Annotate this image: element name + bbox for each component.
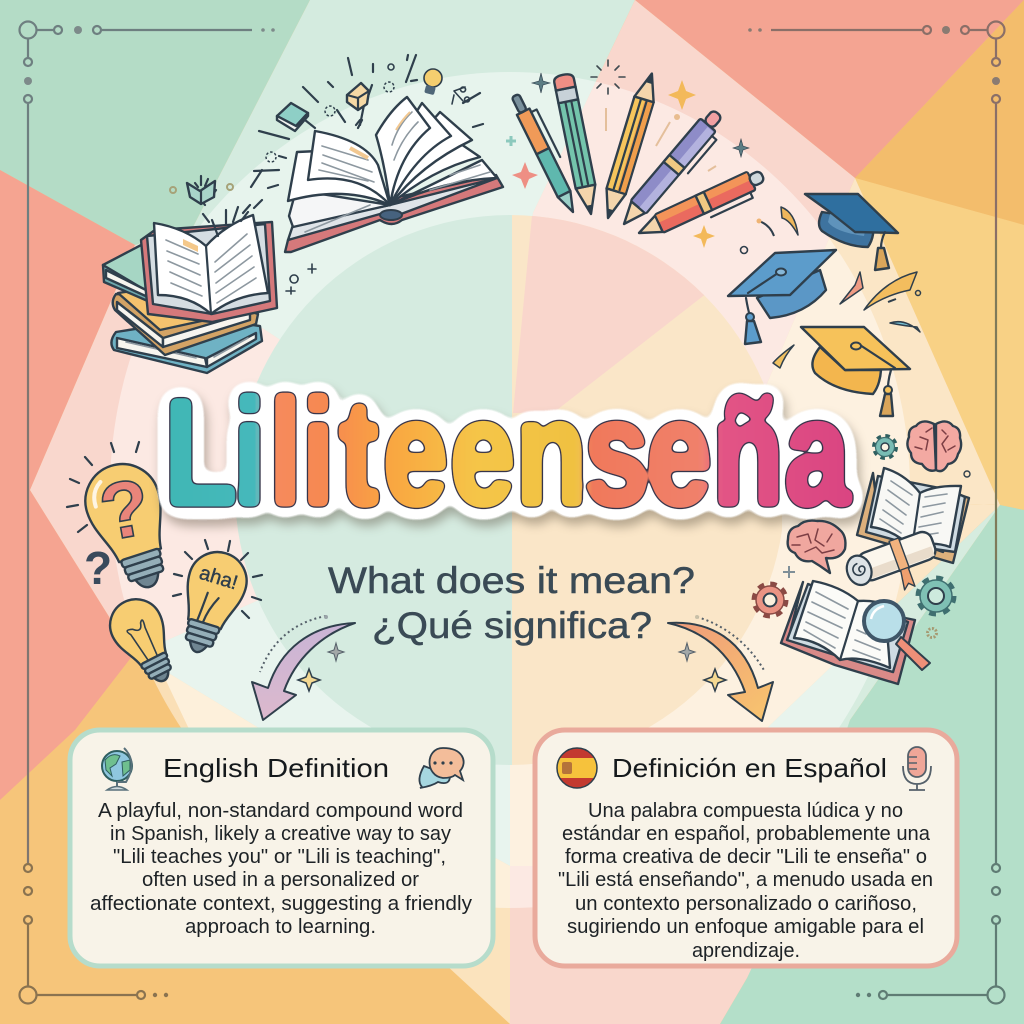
icon: aha lightbulb: aha! [197, 562, 240, 594]
icon: large open book with fanning pages [285, 97, 503, 252]
icon: dark question mark: ? [84, 542, 112, 594]
icon: gear teal small [875, 437, 895, 457]
arrow: right curved orange [668, 615, 773, 721]
subtitle: What does it mean? [328, 560, 695, 601]
icon: small green open book [187, 176, 215, 204]
icon: lightbulb with question mark: ? [93, 461, 157, 558]
icon: aha lightbulb [168, 540, 262, 660]
icon: small teal book [277, 103, 308, 131]
icon: blue cap [728, 250, 836, 344]
icon: stack of books with open book [103, 170, 277, 373]
text: Spanish definition body: un contexto personalizado o cariñoso, [575, 893, 917, 915]
icon: brain upper [907, 421, 961, 471]
icon: yellow pencil [598, 71, 661, 221]
icon: microphone [903, 747, 931, 790]
icon: share node [452, 87, 470, 104]
text: English definition body: "Lili teaches you" or "Lili is teaching", [113, 846, 446, 868]
icon: navy cap [805, 194, 898, 270]
panel: English definition [70, 730, 493, 966]
icon: diploma scroll [842, 527, 945, 606]
icon: gold cap [801, 327, 910, 416]
icon: globe [102, 748, 132, 790]
text: Spanish definition body [558, 800, 933, 962]
icon: green pencil [553, 73, 601, 216]
icon: coral pen [635, 167, 769, 248]
icon: sparkles around pens [506, 60, 749, 254]
text: Spanish definition body: aprendizaje. [692, 940, 800, 962]
icon: graduation caps [728, 194, 920, 416]
arrow: left curved purple [252, 615, 355, 720]
icon: gear teal large [919, 579, 953, 613]
icon: confetti [756, 207, 920, 368]
text: Spanish definition body: forma creativa de decir "Lili te enseña" o [565, 846, 927, 868]
right cluster icons [755, 421, 970, 684]
text: English definition body: in Spanish, likely a creative way to say [110, 823, 451, 845]
icon: small gold gear [928, 628, 936, 638]
icon: plain lightbulb [101, 590, 187, 692]
title: Liliteenseña [165, 368, 851, 536]
text: Spanish definition body: Una palabra compuesta lúdica y no [588, 800, 903, 822]
icon: purple pen [616, 107, 730, 234]
icon: speech bubbles [419, 748, 464, 788]
icon: cube [347, 83, 369, 110]
icon: lightbulb with question mark [67, 442, 185, 598]
icon: Spain flag [557, 748, 597, 788]
subtitle [328, 560, 695, 646]
text: English definition body: A playful, non-standard compound word [98, 800, 463, 822]
subtitle: ¿Qué significa? [372, 605, 652, 646]
icon: small bulb [424, 69, 442, 95]
text: English definition body: approach to learning. [185, 916, 376, 938]
text: English definition body: affectionate context, suggesting a friendly [90, 893, 472, 915]
icon: gear red [755, 585, 785, 615]
heading: Definición en Español: Definición en Español [612, 753, 887, 783]
heading: English Definition: English Definition [163, 753, 389, 783]
icon: pens and pencils fan [509, 71, 769, 248]
icon: open book with magnifier [781, 581, 930, 684]
text: Spanish definition body: sugiriendo un enfoque amigable para el [567, 916, 924, 938]
icon: sparks above large book [254, 55, 483, 294]
text: Spanish definition body: estándar en español, probablemente una [562, 823, 931, 845]
panel: Spanish definition [535, 730, 957, 966]
text: English definition body: often used in a personalized or [142, 869, 419, 891]
icon: teal and orange pen [509, 90, 585, 215]
icon: open book tan [857, 468, 969, 563]
text: English definition body [90, 800, 472, 938]
icon: brain lower [788, 521, 845, 573]
text: Spanish definition body: "Lili está enseñando", a menudo usada en [558, 869, 933, 891]
